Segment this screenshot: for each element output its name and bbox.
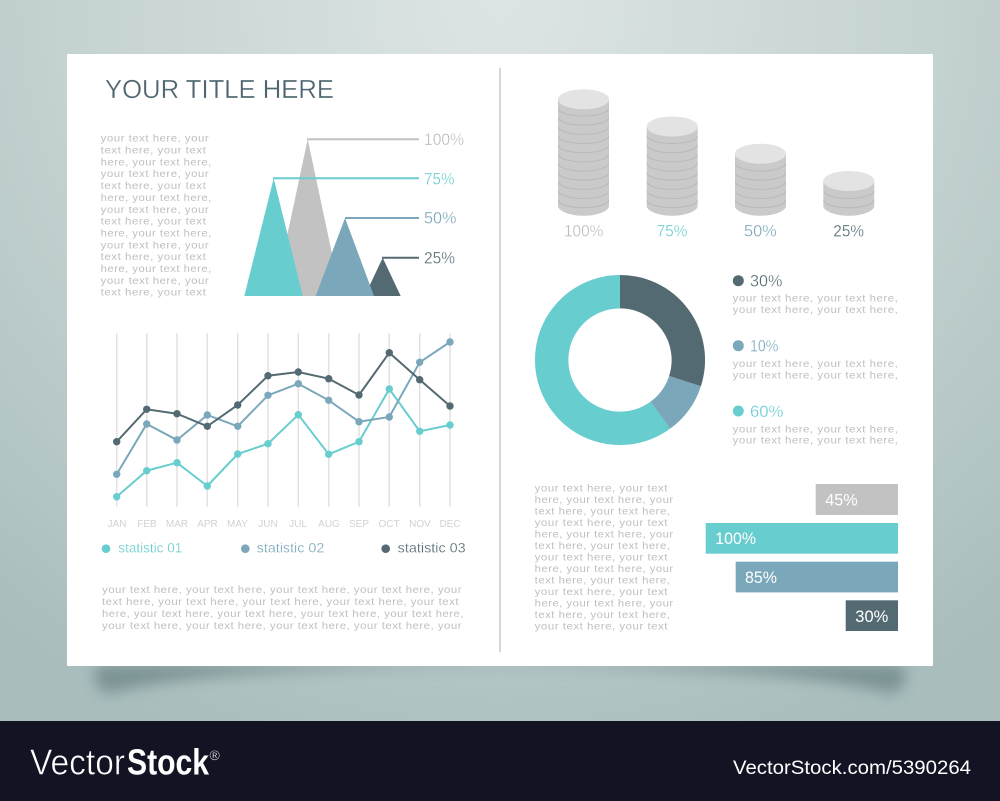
month labels: SEP — [349, 519, 369, 530]
legend item: 60%: your text here, your text here, — [733, 435, 898, 447]
title: YOUR TITLE HERE — [105, 74, 334, 104]
text block: top left: text here, your text — [101, 216, 206, 228]
triangle: 50% — [316, 218, 374, 296]
text block: top left — [101, 133, 212, 299]
text block: top left: text here, your text — [101, 180, 206, 192]
month labels: APR — [197, 519, 218, 530]
bar: 30% — [846, 600, 898, 631]
text block: bottom left: your text here, your text here, your text here, your text here, your — [102, 584, 462, 596]
month labels: NOV — [409, 519, 431, 530]
triangle chart — [244, 131, 464, 296]
coin stacks chart — [558, 89, 874, 241]
series: statistic 01 — [113, 385, 454, 500]
month labels: FEB — [137, 519, 157, 530]
legend item: 30%: 30% — [750, 273, 783, 291]
white page panel — [67, 54, 933, 666]
text block: top left: text here, your text — [101, 287, 206, 299]
segment: 30% — [620, 292, 688, 381]
horizontal bar chart — [706, 484, 898, 631]
text block: top left: here, your text here, — [101, 228, 212, 240]
triangle: 75% — [244, 178, 303, 296]
bar: 100%: 100% — [715, 530, 756, 548]
bar: 85%: 85% — [745, 569, 777, 587]
coin label: 75%: 75% — [657, 223, 688, 241]
grid lines — [117, 333, 450, 507]
leader line: 50% — [345, 217, 419, 219]
series: statistic 02 — [113, 338, 454, 478]
triangle: 100% — [274, 139, 341, 296]
legend item: statistic 03: statistic 03 — [398, 541, 466, 556]
footer url: VectorStock.com/5390264 — [733, 758, 971, 779]
legend item: statistic 02: statistic 02 — [257, 541, 324, 556]
text block: top left: your text here, your — [101, 239, 209, 251]
month labels: JUN — [258, 519, 278, 530]
text block: bottom right: your text here, your text — [535, 517, 668, 529]
text block: bottom left: text here, your text here, your text here, your text here, your text — [102, 596, 459, 608]
month labels: DEC — [439, 519, 461, 530]
footer bar — [0, 721, 1000, 801]
legend item: 10%: your text here, your text here, — [733, 369, 898, 381]
label: 25%: 25% — [424, 249, 455, 267]
footer logo: ® — [210, 747, 220, 763]
leader line: 100% — [307, 138, 419, 140]
text block: bottom right: your text here, your text — [535, 552, 668, 564]
bar: 45%: 45% — [825, 492, 858, 510]
text block: top left: your text here, your — [101, 133, 209, 145]
segment: 10% — [660, 381, 685, 415]
leader line: 25% — [382, 257, 419, 259]
text block: top left: your text here, your — [101, 204, 209, 216]
page shadow — [94, 664, 906, 694]
text block: bottom right: here, your text here, your — [535, 494, 674, 506]
line chart — [108, 333, 461, 530]
legend item: 10% — [733, 338, 898, 381]
legend item: 10%: 10% — [750, 338, 779, 356]
label: 50%: 50% — [424, 210, 457, 228]
text block: top left: text here, your text — [101, 144, 206, 156]
text block: bottom right — [535, 483, 674, 632]
legend — [102, 541, 466, 556]
bar: 30%: 30% — [855, 608, 889, 626]
text block: top left: text here, your text — [101, 251, 206, 263]
coin label: 50%: 50% — [744, 223, 777, 241]
text block: bottom right: your text here, your text — [535, 620, 668, 632]
coin stack: 50% — [735, 144, 786, 216]
donut chart — [552, 292, 688, 428]
legend item: 30%: your text here, your text here, — [733, 304, 898, 316]
center divider — [499, 68, 501, 652]
text block: bottom left: here, your text here, your text here, your text here, your text here, — [102, 608, 464, 620]
label: 100%: 100% — [424, 131, 464, 149]
text block: bottom left: your text here, your text here, your text here, your text here, your — [102, 620, 462, 632]
donut legend — [733, 273, 898, 447]
segment: 60% — [552, 292, 660, 428]
text block: top left: your text here, your — [101, 168, 209, 180]
legend item: 60%: your text here, your text here, — [733, 423, 898, 435]
month labels: MAR — [166, 519, 188, 530]
text block: bottom right: your text here, your text — [535, 483, 668, 495]
coin stack: 25% — [823, 171, 874, 216]
text block: bottom right: text here, your text here, — [535, 506, 670, 518]
footer logo: Stock — [127, 741, 210, 782]
legend item: 10%: your text here, your text here, — [733, 358, 898, 370]
leader line: 75% — [273, 177, 419, 179]
footer logo — [30, 741, 220, 782]
coin stack: 75% — [647, 116, 698, 216]
text block: bottom right: here, your text here, your — [535, 563, 674, 575]
coin stack: 100% — [558, 89, 609, 216]
bar: 100% — [706, 523, 898, 554]
text block: top left: here, your text here, — [101, 192, 212, 204]
text block: bottom right: here, your text here, your — [535, 529, 674, 541]
text block: bottom right: here, your text here, your — [535, 597, 674, 609]
coin label: 100%: 100% — [564, 223, 604, 241]
month labels: MAY — [227, 519, 248, 530]
bar: 45% — [816, 484, 898, 515]
text block: bottom right: text here, your text here, — [535, 540, 670, 552]
text block: top left: your text here, your — [101, 275, 209, 287]
series: statistic 03 — [113, 349, 454, 445]
triangle: 25% — [365, 258, 401, 296]
month labels: OCT — [378, 519, 400, 530]
text block: bottom right: your text here, your text — [535, 586, 668, 598]
text block: top left: here, your text here, — [101, 156, 212, 168]
bar: 85% — [736, 562, 898, 592]
coin label: 25%: 25% — [833, 223, 864, 241]
month labels: JUL — [289, 519, 307, 530]
legend item: 30% — [733, 273, 898, 316]
text block: top left: here, your text here, — [101, 263, 212, 275]
text block: bottom right: text here, your text here, — [535, 574, 670, 586]
text block: bottom right: text here, your text here, — [535, 609, 670, 621]
text block: bottom left — [102, 584, 464, 632]
month labels: AUG — [318, 519, 340, 530]
legend item: 60% — [733, 403, 898, 447]
legend item: statistic 01: statistic 01 — [118, 541, 182, 556]
label: 75%: 75% — [424, 170, 455, 188]
footer logo: Vector — [30, 741, 125, 782]
legend item: 30%: your text here, your text here, — [733, 293, 898, 305]
legend item: 60%: 60% — [750, 403, 784, 421]
month labels: JAN — [108, 519, 126, 530]
month labels — [108, 519, 461, 530]
